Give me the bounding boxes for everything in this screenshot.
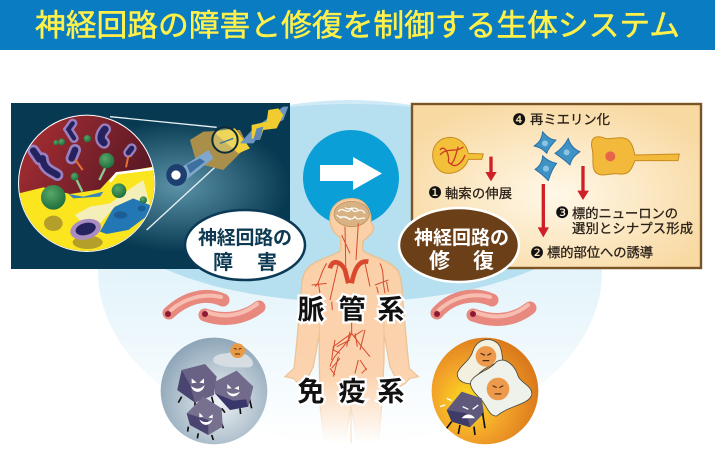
label: immune system: 疫 [338, 377, 366, 407]
icon: defeated monster [440, 392, 485, 435]
callout: repair: 復 [473, 250, 494, 273]
panel: autoreactive immune cells [161, 338, 267, 444]
magnified lesion [17, 113, 157, 257]
icon: blood vessels right [434, 295, 530, 319]
step labels: 選別とシナプス形成 [572, 221, 693, 236]
panel: nerve circuit repair [412, 104, 701, 268]
step labels: 再ミエリン化 [530, 112, 610, 127]
icon: target neuron [592, 137, 679, 175]
label: immune system: 免 [298, 377, 324, 407]
title banner: 神経回路の障害と修復を制御する生体システム [35, 9, 680, 43]
step labels: ❸ [555, 203, 569, 222]
callout: damage [185, 210, 305, 280]
step labels [428, 110, 693, 262]
magnifier lines [110, 117, 230, 230]
step labels: 標的部位への誘導 [547, 245, 653, 260]
immune cells [33, 123, 132, 175]
step labels: ❷ [530, 243, 544, 262]
title banner [0, 0, 715, 50]
step labels: ❹ [512, 110, 526, 129]
callout: damage: 障 [213, 251, 233, 274]
brain [334, 201, 369, 227]
callout: damage: 神経回路の [198, 227, 292, 249]
label: immune system: 系 [378, 377, 404, 407]
arteries [312, 223, 388, 377]
icon: macrophages [457, 340, 532, 416]
icon: monster cells [178, 397, 252, 440]
icon: regenerating axon neuron [433, 137, 483, 173]
callout: damage: 害 [257, 251, 277, 274]
icon: damaged nerve fibre [166, 107, 288, 186]
icon: resting microglia [213, 343, 253, 367]
label: vascular system: 管 [338, 295, 366, 325]
body silhouette [285, 199, 418, 443]
label: vascular system: 脈 [298, 295, 324, 325]
arrows [485, 157, 589, 237]
callout: repair [399, 208, 519, 282]
step labels: 軸索の伸展 [445, 186, 512, 201]
icon: central arrow [303, 130, 399, 226]
human body [285, 199, 418, 443]
callout: repair: 神経回路の [414, 227, 509, 249]
panel: nerve circuit damage [11, 103, 290, 269]
icon: blood vessels left [165, 296, 259, 318]
step labels: ❶ [428, 183, 442, 202]
background glow [98, 100, 602, 444]
icon: oligodendrocytes [534, 132, 580, 181]
panel: immune repair cells [432, 338, 538, 444]
label: immune system [298, 377, 404, 407]
label: vascular system [298, 295, 404, 325]
step labels: 標的ニューロンの [572, 206, 678, 221]
callout: repair: 修 [429, 250, 450, 273]
label: vascular system: 系 [378, 295, 404, 325]
